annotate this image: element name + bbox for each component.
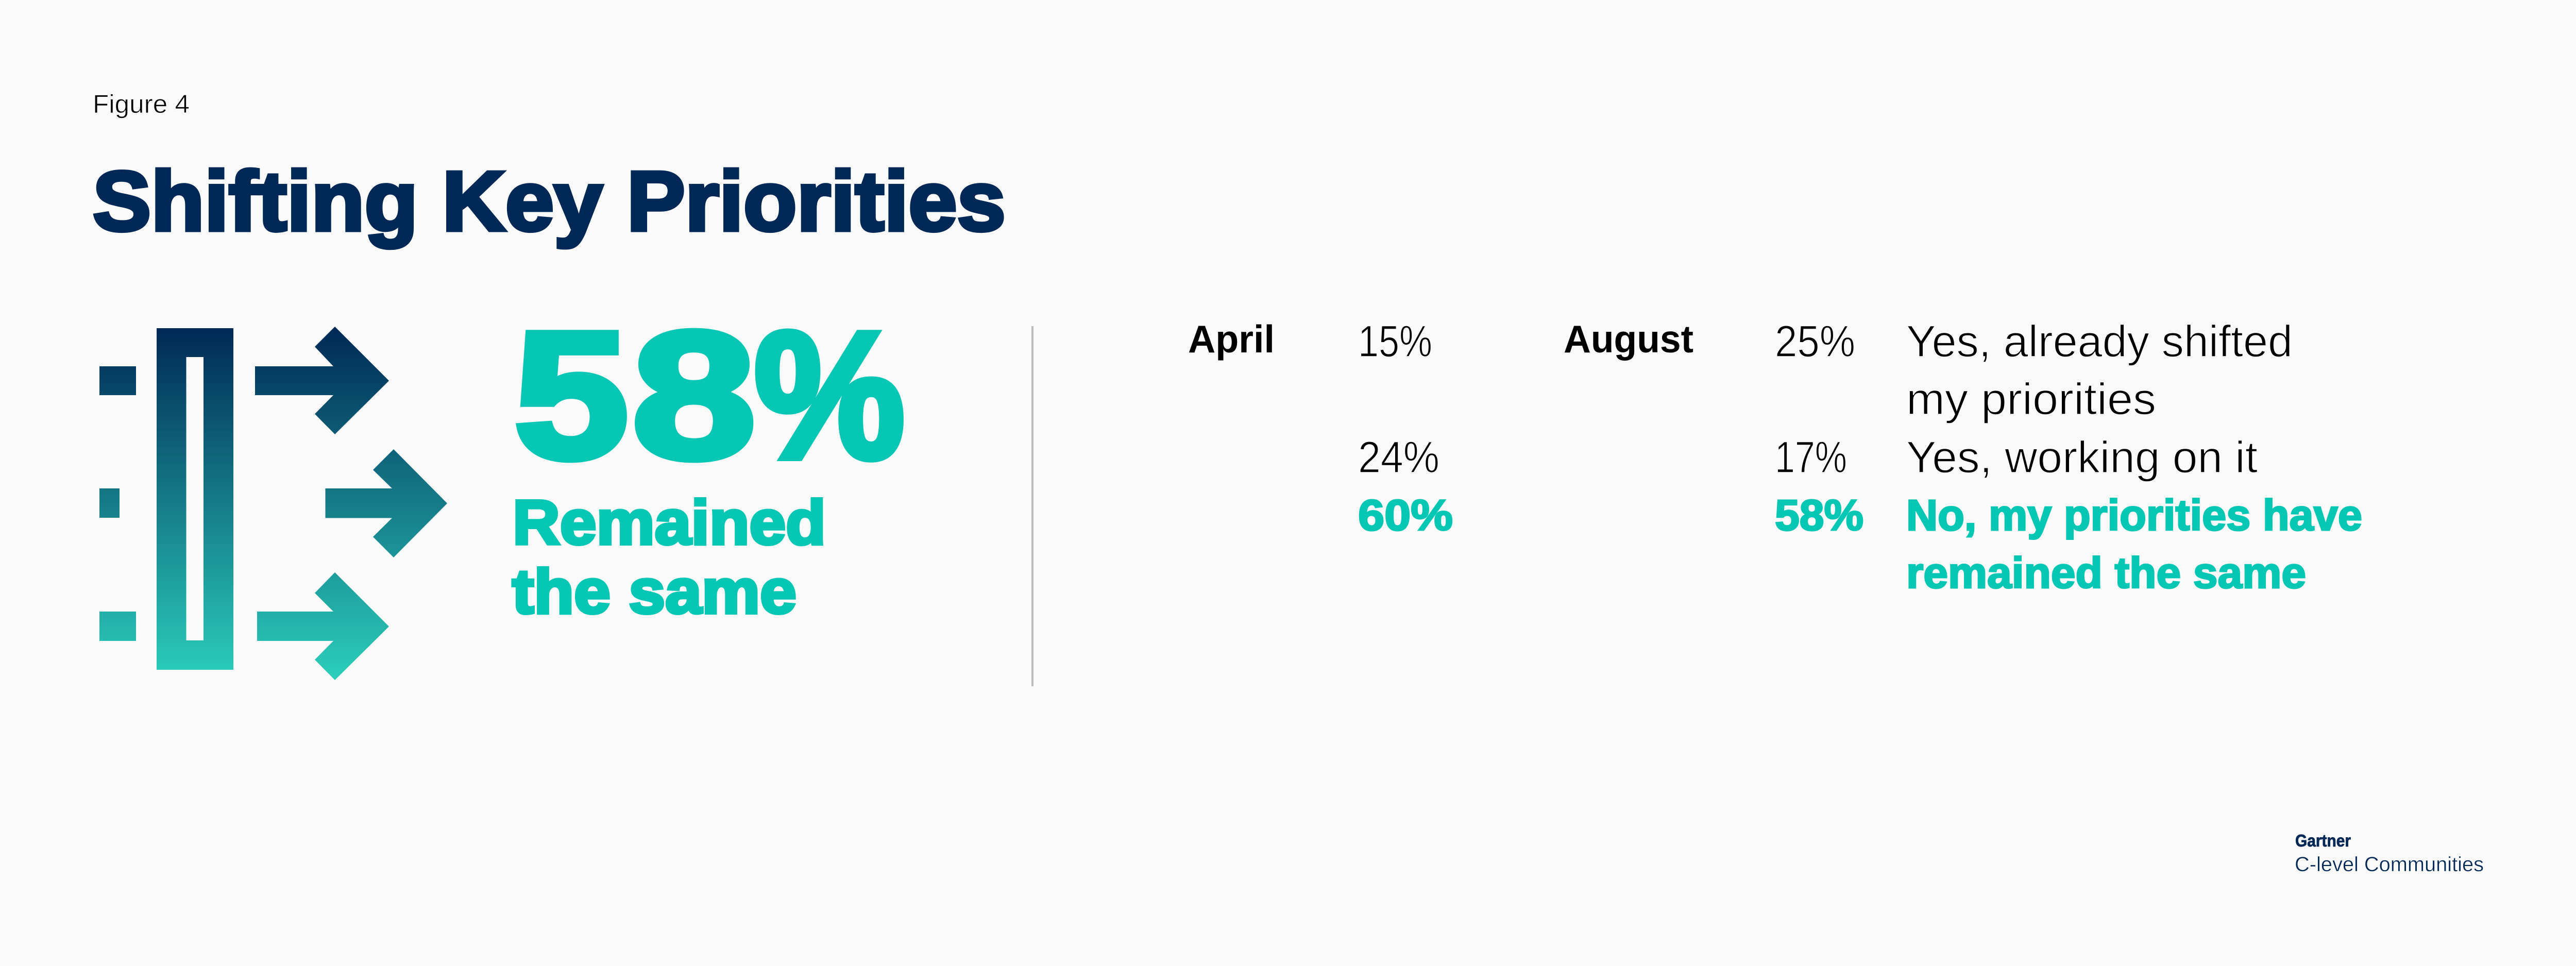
stat caption: Remained xyxy=(513,487,826,557)
response labels: Yes, working on it xyxy=(1906,433,2258,482)
arrow: top xyxy=(255,327,389,434)
footer logo: C-level Communities xyxy=(2295,853,2484,876)
footer logo: Gartner xyxy=(2295,831,2351,850)
August values: 25% xyxy=(1775,317,1855,366)
table: April vs August responses xyxy=(1188,317,2362,597)
August values: 17% xyxy=(1775,433,1847,482)
icon: middle small square xyxy=(99,488,120,518)
response labels xyxy=(1906,317,2362,597)
response labels: remained the same xyxy=(1906,549,2306,597)
icon: bottom small square xyxy=(99,612,136,641)
response labels: my priorities xyxy=(1906,375,2156,424)
April values xyxy=(1358,317,1453,539)
icon: central bar xyxy=(157,328,233,670)
response labels: No, my priorities have xyxy=(1906,491,2362,539)
arrow: bottom xyxy=(257,572,389,680)
column heading: August: August xyxy=(1564,317,1693,361)
icon: top small square xyxy=(99,366,136,395)
April values: 60% xyxy=(1358,491,1453,539)
column heading: April: April xyxy=(1188,317,1275,361)
figure label: Figure 4 xyxy=(93,90,190,118)
headline stat: 8 xyxy=(632,295,756,496)
headline stat: 5 xyxy=(514,295,629,496)
stat caption: the same xyxy=(512,556,796,626)
headline stat: % xyxy=(754,295,905,496)
footer logo xyxy=(2295,831,2484,876)
stat caption xyxy=(512,487,826,626)
response labels: Yes, already shifted xyxy=(1906,317,2293,366)
headline stat xyxy=(514,295,905,496)
divider xyxy=(1031,326,1033,686)
title: Shifting Key Priorities xyxy=(93,154,1006,248)
arrow: middle xyxy=(326,449,447,557)
August values xyxy=(1775,317,1863,539)
April values: 15% xyxy=(1358,317,1432,366)
April values: 24% xyxy=(1358,433,1439,482)
August values: 58% xyxy=(1775,491,1863,539)
icon: shifting arrows xyxy=(99,327,447,680)
